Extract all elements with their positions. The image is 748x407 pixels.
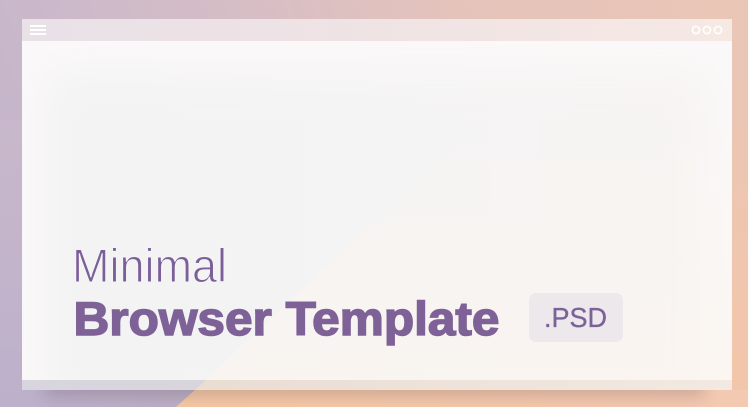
title bar bbox=[22, 19, 732, 41]
badge: .PSD: .PSD bbox=[544, 302, 607, 333]
icon: window control dots bbox=[692, 26, 722, 34]
icon: hamburger menu bbox=[30, 25, 46, 35]
title: Browser Template: Browser Template bbox=[74, 292, 500, 345]
footer bar bbox=[22, 380, 732, 390]
title: Minimal: Minimal bbox=[72, 240, 227, 293]
badge: .PSD bbox=[529, 293, 623, 342]
